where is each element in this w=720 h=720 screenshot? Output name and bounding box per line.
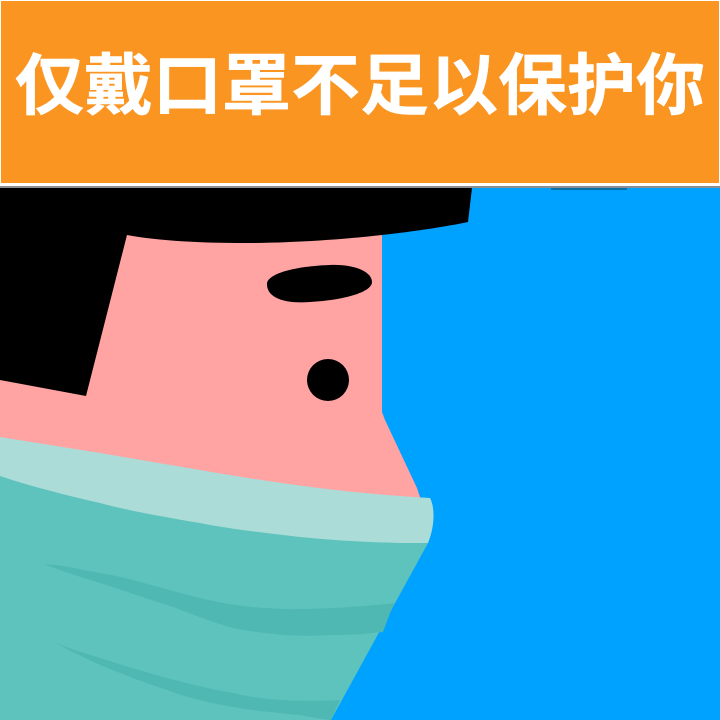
header banner bbox=[1, 1, 719, 183]
mask top band bbox=[0, 437, 434, 543]
eye bbox=[307, 359, 349, 401]
mask fold upper bbox=[44, 564, 395, 636]
illustration: face with mask bbox=[0, 186, 720, 720]
eyebrow bbox=[267, 265, 372, 302]
hair bbox=[0, 188, 472, 396]
title: 仅戴口罩不足以保护你 bbox=[15, 49, 705, 124]
mask body bbox=[0, 470, 428, 720]
blue background bbox=[0, 188, 720, 720]
face bbox=[0, 188, 421, 560]
banner background bbox=[1, 1, 719, 183]
mask fold lower bbox=[56, 643, 340, 720]
